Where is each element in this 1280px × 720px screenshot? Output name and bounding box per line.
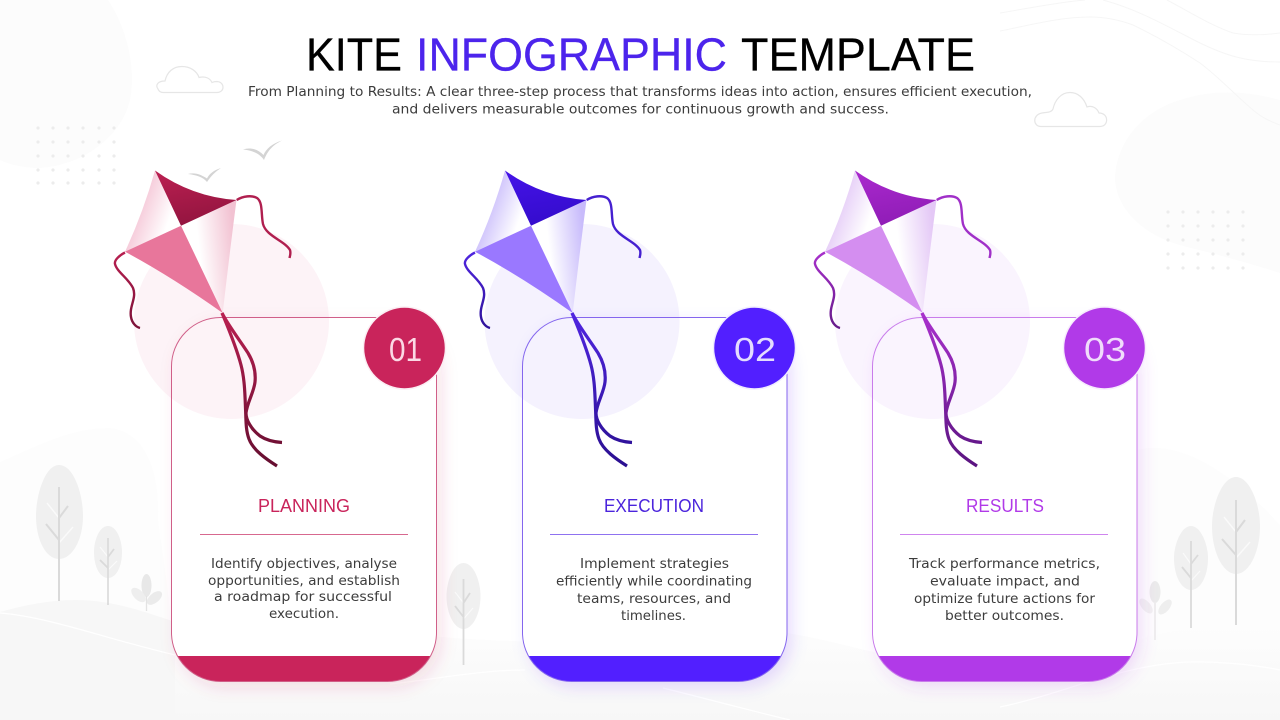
- tree 1: [36, 465, 83, 601]
- text: results description: [908, 557, 1100, 624]
- subtitle: From Planning to Results: A clear three-step process that transforms ideas into action, ensures efficient execution,: [248, 85, 1032, 100]
- backdrop circle 2: [484, 224, 680, 419]
- divider 3: [900, 534, 1108, 535]
- text: execution description: efficiently while coordinating: [556, 574, 752, 590]
- divider 2: [550, 534, 758, 535]
- subtitle: and delivers measurable outcomes for continuous growth and success.: [392, 102, 889, 118]
- kite 1: [115, 170, 290, 466]
- text: execution description: timelines.: [621, 609, 686, 624]
- dot grid right: [1166, 210, 1245, 270]
- heading: execution: EXECUTION: [604, 495, 704, 516]
- backdrop circle 1: [134, 224, 329, 419]
- card 2: [522, 317, 798, 693]
- heading: planning: PLANNING: [258, 495, 350, 516]
- kite 2: [465, 170, 640, 466]
- text: results description: better outcomes.: [945, 609, 1064, 624]
- icon: bird lower: [188, 168, 221, 182]
- card 3: [871, 317, 1148, 694]
- tree right large: [1212, 477, 1260, 625]
- text: execution description: Implement strategies: [580, 557, 729, 572]
- text: results description: Track performance metrics,: [908, 557, 1100, 572]
- panel: planning: [115, 170, 446, 682]
- backdrop circle 3: [835, 224, 1030, 419]
- badge 02: 02: [734, 331, 776, 368]
- tree 3: [446, 563, 480, 665]
- badge 01: [364, 307, 446, 389]
- text: results description: optimize future actions for: [914, 592, 1096, 607]
- subtitle: [248, 85, 1032, 118]
- text: planning description: a roadmap for successful: [214, 590, 392, 605]
- title: KITE: [306, 28, 402, 80]
- badge 02: [714, 307, 796, 389]
- card 1: [171, 317, 447, 693]
- divider 1: [200, 534, 408, 535]
- text: planning description: execution.: [269, 607, 339, 622]
- kite 3: [815, 170, 990, 466]
- text: execution description: [556, 557, 752, 624]
- tree right small: [1174, 526, 1208, 628]
- dot grid left: [36, 126, 116, 185]
- panel: results: [815, 170, 1146, 682]
- plant right: [1137, 581, 1174, 640]
- panel: execution: [465, 170, 796, 682]
- icon: cloud right: [1035, 92, 1107, 126]
- title: TEMPLATE: [741, 28, 975, 80]
- icon: bird upper: [243, 140, 282, 160]
- text: results description: evaluate impact, and: [930, 574, 1080, 590]
- badge 01: 01: [389, 331, 422, 368]
- text: execution description: teams, resources, and: [577, 592, 731, 607]
- icon: cloud left: [157, 66, 223, 92]
- tree 2: [94, 526, 122, 605]
- badge 03: 03: [1084, 331, 1126, 368]
- text: planning description: [208, 557, 400, 622]
- plant left: [129, 574, 164, 611]
- text: planning description: Identify objectives, analyse: [211, 557, 397, 572]
- text: planning description: opportunities, and establish: [208, 574, 400, 589]
- title: [306, 28, 975, 80]
- title: INFOGRAPHIC: [416, 28, 727, 80]
- badge 03: [1064, 307, 1146, 389]
- heading: results: RESULTS: [966, 495, 1044, 516]
